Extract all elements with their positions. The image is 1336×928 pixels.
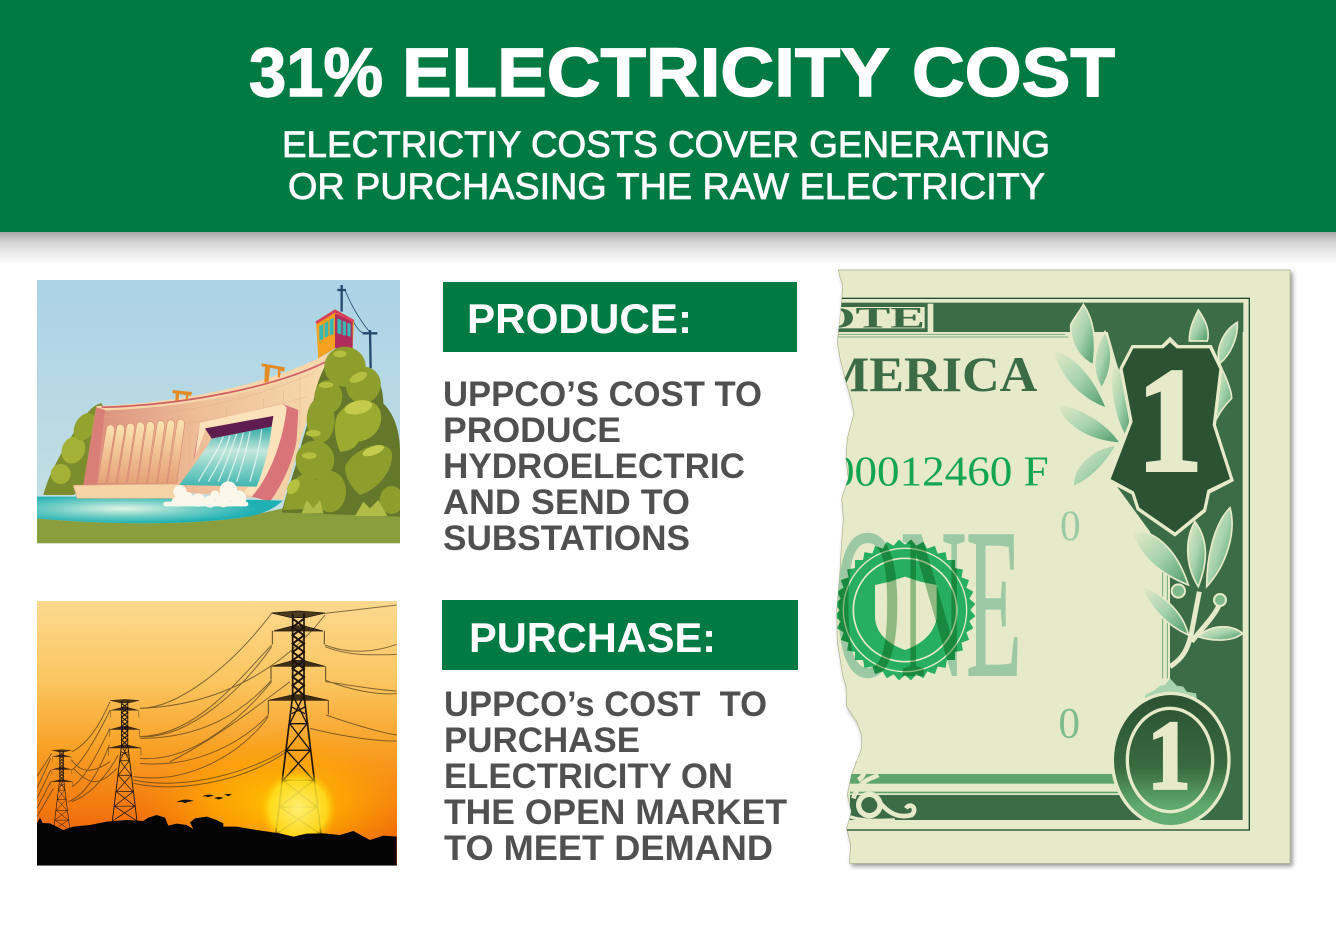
- text block: produce description: UPPCO’S COST TO: [443, 374, 762, 414]
- text: america: MERICA: [820, 346, 1037, 402]
- waterfall streaks: [198, 429, 262, 482]
- spillway columns: [97, 419, 185, 483]
- shield with numeral one: 1: [1137, 339, 1202, 503]
- title: COST: [912, 34, 1115, 111]
- text block: produce description: HYDROELECTRIC: [443, 446, 745, 486]
- heading: purchase: PURCHASE:: [469, 614, 716, 661]
- text block: produce description: AND SEND TO: [443, 482, 690, 522]
- power lines: [37, 605, 397, 817]
- spillway opening: [205, 416, 273, 439]
- dam wall: [83, 350, 334, 502]
- sunset glow: [160, 742, 397, 840]
- tower: middle: [108, 699, 141, 821]
- bottom stripes: [850, 774, 1117, 784]
- text block: produce description: SUBSTATIONS: [443, 518, 690, 558]
- title: [249, 34, 1115, 111]
- spillway frame: [193, 404, 298, 502]
- text block: produce description: [443, 374, 762, 558]
- border frame: [823, 298, 1249, 830]
- icon: transmission poles: [337, 285, 377, 368]
- laurel leaves upper: [1053, 304, 1237, 487]
- heading: purchase: [442, 600, 798, 670]
- panel: produce: [443, 282, 797, 558]
- left hill: [43, 403, 105, 495]
- tower: large front: [268, 611, 328, 834]
- right hill: [282, 347, 404, 517]
- illustration: torn dollar bill: ONE: [835, 486, 1022, 722]
- right band: [850, 328, 1243, 820]
- top band: [933, 303, 1243, 332]
- silhouette: treeline: [37, 815, 397, 866]
- text block: purchase description: UPPCO’s COST TO: [444, 684, 767, 724]
- illustration: transmission towers at sunset: [37, 601, 420, 872]
- header banner: [0, 0, 1336, 232]
- heading: produce: [443, 282, 797, 352]
- birds: [176, 794, 232, 803]
- corner scrollwork: [850, 758, 914, 820]
- text block: produce description: PRODUCE: [443, 410, 621, 450]
- text block: purchase description: TO MEET DEMAND: [444, 828, 773, 868]
- tower: far left: [51, 750, 72, 830]
- text block: purchase description: THE OPEN MARKET: [444, 792, 787, 832]
- oval badge with numeral one: 1: [1147, 702, 1191, 811]
- header banner shadow: [0, 232, 1336, 264]
- gantries: [173, 363, 285, 401]
- subtitle: ELECTRICTIY COSTS COVER GENERATING: [282, 124, 1050, 165]
- seal: [835, 540, 975, 680]
- subtitle: [282, 124, 1050, 207]
- heading: produce: PRODUCE:: [467, 295, 692, 342]
- foam: [163, 481, 248, 508]
- text block: purchase description: [444, 684, 787, 868]
- text: small zero top: 0: [1060, 502, 1081, 550]
- title: ELECTRICITY: [402, 34, 890, 111]
- bill paper: [837, 270, 1290, 863]
- illustration: hydroelectric dam: [37, 280, 404, 543]
- text: small zero bottom: 0: [1058, 700, 1080, 748]
- note label box: [838, 304, 928, 332]
- oval badge with numeral one: [1111, 678, 1231, 828]
- illustration: torn dollar bill: [815, 270, 1290, 863]
- text block: purchase description: ELECTRICITY ON: [444, 756, 733, 796]
- weir platform: [73, 484, 178, 498]
- note label box: OTE: [815, 303, 925, 335]
- laurel leaves lower: [1132, 508, 1243, 667]
- panel: purchase: [442, 600, 798, 868]
- waterfall: [179, 427, 272, 487]
- ground: [37, 508, 400, 543]
- subtitle: OR PURCHASING THE RAW ELECTRICITY: [288, 166, 1045, 207]
- control house: [315, 309, 354, 358]
- title: 31%: [249, 34, 383, 111]
- water pool: [37, 497, 283, 523]
- shield with numeral one: [1106, 337, 1234, 537]
- text block: purchase description: PURCHASE: [444, 720, 640, 760]
- sun: [264, 771, 334, 837]
- text: serial number: 00012460 F: [832, 450, 1049, 496]
